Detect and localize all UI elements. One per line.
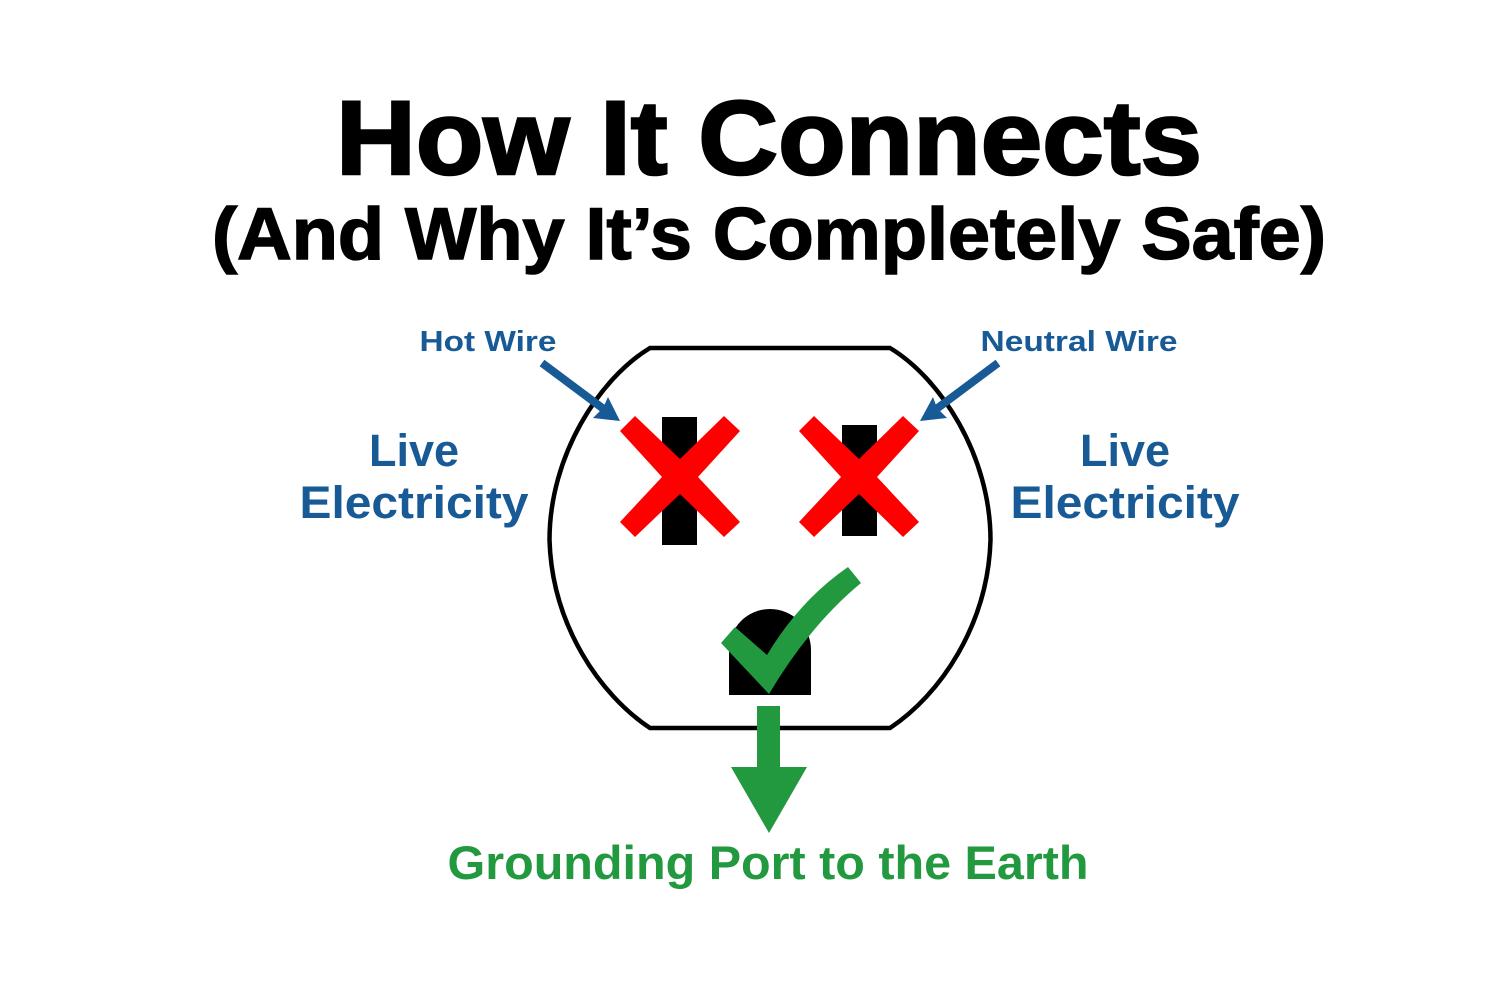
label: live electricity right: Electricity: [1010, 477, 1240, 528]
label: hot wire: Hot Wire: [420, 326, 556, 358]
label: live electricity left: Electricity: [300, 477, 528, 528]
outlet outline: [550, 348, 990, 728]
label: grounding port: Grounding Port to the Earth: [448, 836, 1088, 889]
hot slot with red cross: [620, 416, 740, 545]
label: live electricity right: Live: [1080, 425, 1170, 476]
title: How It Connects: [336, 80, 1202, 197]
label: live electricity left: Live: [369, 425, 459, 476]
arrow: neutral wire: [920, 363, 998, 421]
label: neutral wire: Neutral Wire: [980, 326, 1178, 358]
green check mark: [721, 567, 861, 694]
arrow: hot wire: [542, 363, 620, 421]
ground arrow: [731, 706, 807, 833]
label: live electricity left: [300, 425, 528, 528]
label: live electricity right: [1010, 425, 1240, 528]
ground slot: [729, 609, 811, 695]
neutral slot with red cross: [799, 416, 919, 537]
subtitle: (And Why It’s Completely Safe): [212, 194, 1326, 275]
